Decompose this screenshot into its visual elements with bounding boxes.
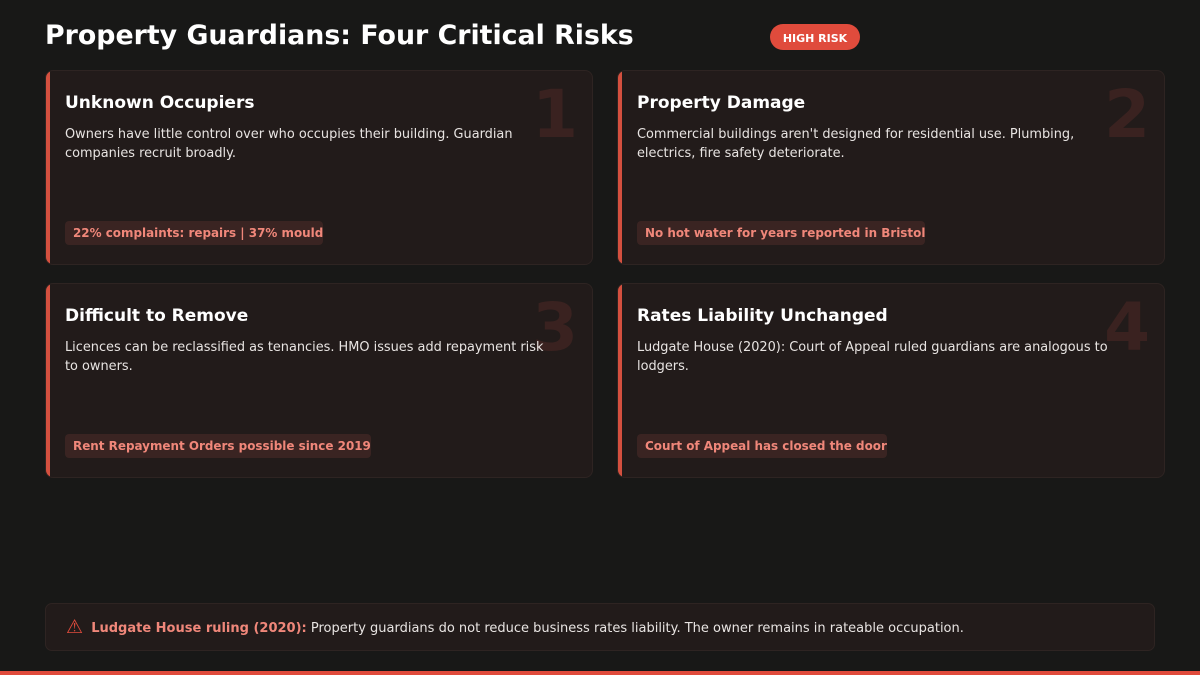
tag: [637, 434, 887, 458]
panel: difficult to remove: [45, 283, 593, 478]
tag: [637, 221, 925, 245]
number 2: 2: [1104, 76, 1150, 153]
panel: property damage: [617, 70, 1165, 265]
heading: Difficult to Remove: [65, 306, 248, 326]
text: Ludgate House (2020): Court of Appeal ruled guardians are analogous to lodgers.: [637, 340, 1108, 374]
tag: Rent Repayment Orders possible since 2019: [73, 439, 371, 453]
tag: No hot water for years reported in Bristol: [645, 226, 925, 240]
badge: high risk: HIGH RISK: [783, 32, 847, 45]
callout: ⚠ Ludgate House ruling (2020): Property guardians do not reduce business rates liability. The owner remains in rateable occupation.: [66, 616, 964, 638]
panel: unknown occupiers: [45, 70, 593, 265]
title: Property Guardians: Four Critical Risks: [45, 20, 634, 51]
number 1: 1: [532, 76, 578, 153]
callout: [45, 603, 1155, 651]
number 4: 4: [1104, 289, 1150, 366]
tag: [65, 434, 371, 458]
panel: rates liability: [617, 283, 1165, 478]
text: Owners have little control over who occupies their building. Guardian companies recruit broadly.: [65, 127, 512, 161]
text: Licences can be reclassified as tenancies. HMO issues add repayment risk to owners.: [65, 340, 543, 374]
tag: 22% complaints: repairs | 37% mould: [73, 226, 323, 240]
text: Commercial buildings aren't designed for residential use. Plumbing, electrics, fire safety deteriorate.: [637, 127, 1074, 161]
heading: Unknown Occupiers: [65, 93, 254, 113]
tag: [65, 221, 323, 245]
heading: Property Damage: [637, 93, 805, 113]
heading: Rates Liability Unchanged: [637, 306, 888, 326]
badge: high risk: [770, 24, 860, 50]
tag: Court of Appeal has closed the door: [645, 439, 887, 453]
number 3: 3: [532, 289, 578, 366]
